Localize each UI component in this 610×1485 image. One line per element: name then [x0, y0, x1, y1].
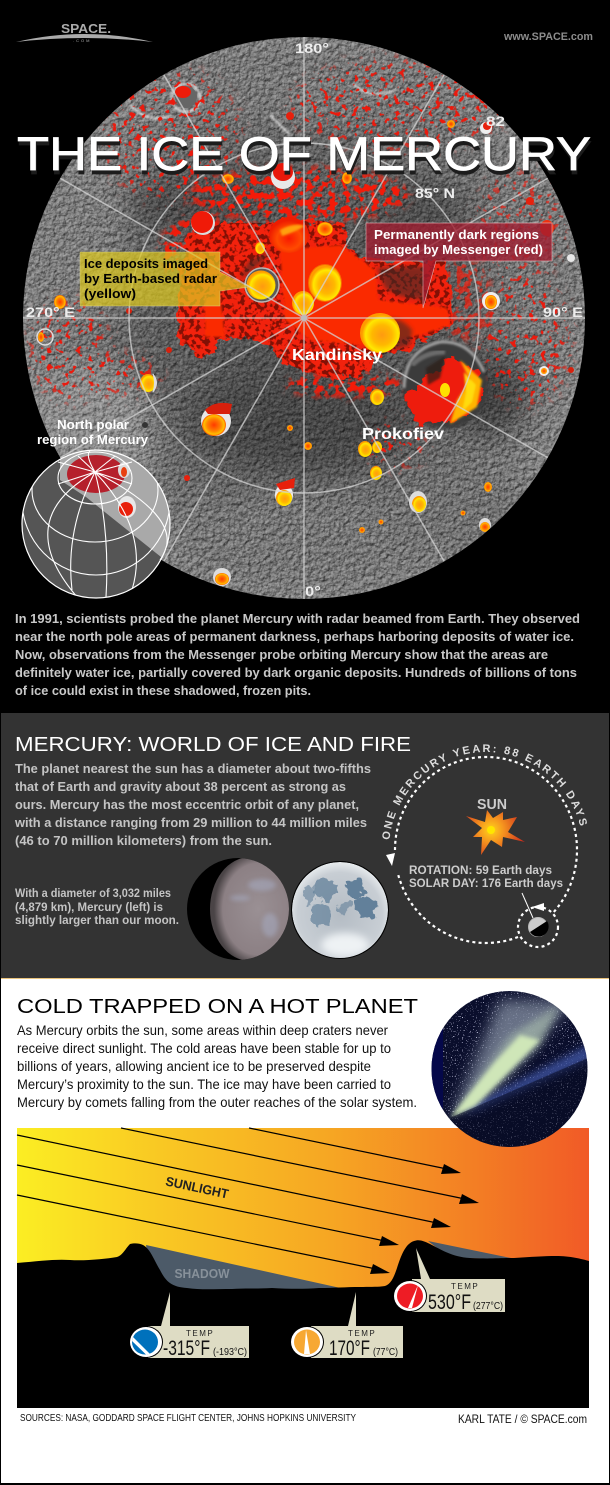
body text: As Mercury orbits the sun, some areas within deep craters never — [17, 1022, 388, 1038]
coordinate labels: 0° — [305, 583, 321, 599]
label: north polar region — [37, 417, 149, 447]
sunlight arrows — [17, 1128, 465, 1269]
sparse red speckles — [24, 50, 578, 476]
intro paragraph: of ice could exist in these shadowed, frozen pits. — [15, 683, 311, 698]
title: THE ICE OF MERCURY — [17, 127, 591, 180]
callout: ice deposits: Ice deposits imaged — [84, 256, 208, 271]
callout: -315 F: -315°F — [163, 1337, 210, 1360]
size comparison text: With a diameter of 3,032 miles — [15, 886, 171, 900]
callout: ice deposits — [80, 252, 249, 306]
logo: SPACE.com: SPACE. — [61, 21, 111, 36]
body text — [14, 761, 371, 848]
solid red core — [205, 245, 450, 345]
coordinate labels: 180° — [295, 40, 329, 56]
dark mottling inside the red area — [177, 220, 452, 380]
image: Mercury — [187, 857, 290, 961]
body text: Mercury’s proximity to the sun. The ice may have been carried to — [17, 1076, 391, 1092]
coordinate labels: 85° N — [415, 185, 455, 201]
body text — [17, 1022, 417, 1110]
callout: 170 F: TEMP — [348, 1329, 376, 1338]
image: Moon — [291, 861, 389, 959]
callout: permanently dark regions: imaged by Messenger (red) — [374, 242, 543, 257]
body text: billions of years, allowing ancient ice to be preserved despite — [17, 1058, 371, 1074]
crater labels: Prokofiev — [362, 426, 444, 443]
label: north polar region: North polar — [57, 417, 129, 432]
surface tone variation — [34, 93, 580, 560]
body text: receive direct sunlight. The cold areas have been stable for up to — [17, 1040, 391, 1056]
label: north polar region: region of Mercury — [37, 432, 149, 447]
orbit diagram — [382, 744, 587, 948]
website url: www.SPACE.com — [503, 31, 593, 43]
sunlight diagram — [17, 1128, 589, 1408]
crater labels — [292, 347, 444, 443]
latitude and longitude grid — [23, 37, 585, 599]
logo: SPACE.com: .COM — [73, 38, 91, 43]
coordinate labels — [26, 40, 583, 599]
size comparison text — [15, 886, 179, 927]
small polar craters — [37, 86, 575, 586]
bright rims in the upper left — [128, 81, 396, 136]
permanently dark regions (red) — [177, 220, 452, 380]
curved label: ONE MERCURY YEAR: 88 EARTH DAYS — [382, 744, 587, 840]
intro paragraph: definitely water ice, partially covered by dark organic deposits. Hundreds of billions of tons — [15, 665, 577, 680]
callout: 170 F: 170°F — [329, 1337, 370, 1360]
size comparison text: slightly larger than our moon. — [15, 913, 179, 927]
large ice craters (yellow) — [191, 163, 400, 353]
Mercury in orbit — [518, 907, 558, 947]
panel: world of ice and fire — [1, 713, 609, 978]
callout: 530 F: TEMP — [451, 1282, 479, 1291]
callout: ice deposits: (yellow) — [84, 286, 136, 301]
heading: MERCURY: WORLD OF ICE AND FIRE — [15, 734, 411, 756]
sunlight label: SUNLIGHT — [164, 1174, 230, 1202]
locator globe — [21, 449, 171, 599]
callout: -315 F: TEMP — [186, 1329, 214, 1338]
map: north polar region of Mercury — [20, 35, 590, 601]
callout: -315 F: (-193°C) — [213, 1347, 247, 1358]
coordinate labels: 270° E — [26, 304, 75, 320]
body text: that of Earth and gravity about 38 percent as strong as — [15, 779, 346, 794]
body text: with a distance ranging from 29 million to 44 million miles — [14, 815, 367, 830]
body text: Mercury by comets falling from the outer reaches of the solar system. — [17, 1094, 417, 1110]
body text: (46 to 70 million kilometers) from the sun. — [15, 833, 272, 848]
rotation text: ROTATION: 59 Earth days — [409, 863, 552, 877]
sun icon — [466, 810, 525, 855]
callout: 170 F: (77°C) — [373, 1347, 398, 1358]
title: THE ICE OF MERCURY — [18, 131, 592, 184]
image: comet — [431, 991, 590, 1147]
logo: SPACE.com — [16, 21, 153, 43]
dense red speckles — [154, 162, 497, 404]
body text: ours. Mercury has the most eccentric orbit of any planet, — [15, 797, 359, 812]
rotation text: SOLAR DAY: 176 Earth days — [409, 876, 563, 890]
callout: 530 F: (277°C) — [473, 1301, 503, 1312]
panel: cold trapped — [1, 978, 609, 1483]
intro paragraph — [15, 611, 580, 698]
Prokofiev crater — [402, 341, 488, 429]
heading: COLD TRAPPED ON A HOT PLANET — [17, 996, 418, 1018]
callout: 530 F — [393, 1248, 505, 1314]
callout: permanently dark regions — [366, 223, 552, 308]
shadow areas — [146, 1241, 516, 1290]
callout: 530 F: 530°F — [428, 1291, 471, 1314]
crater labels: Kandinsky — [292, 347, 382, 364]
author credit: KARL TATE / © SPACE.com — [458, 1412, 587, 1426]
surface texture — [20, 35, 590, 601]
coordinate labels: 82 — [486, 113, 505, 129]
callout: ice deposits: by Earth-based radar — [84, 271, 217, 286]
rotation text — [409, 863, 563, 890]
intro paragraph: near the north pole areas of permanent darkness, perhaps harboring deposits of water ice. — [15, 629, 574, 644]
source credits: SOURCES: NASA, GODDARD SPACE FLIGHT CENTER, JOHNS HOPKINS UNIVERSITY — [20, 1413, 356, 1424]
shadow label: SHADOW — [174, 1266, 230, 1281]
size comparison text: (4,879 km), Mercury (left) is — [15, 900, 163, 914]
callout: -315 F — [129, 1292, 249, 1360]
callout: permanently dark regions: Permanently dark regions — [374, 227, 539, 242]
sun label: SUN — [477, 796, 507, 813]
intro paragraph: In 1991, scientists probed the planet Mercury with radar beamed from Earth. They observed — [15, 611, 580, 626]
intro paragraph: Now, observations from the Messenger probe orbiting Mercury show that the areas are — [15, 647, 548, 662]
coordinate labels: 90° E — [543, 304, 583, 320]
body text: The planet nearest the sun has a diameter about two-fifths — [15, 761, 371, 776]
callout: 170 F — [290, 1292, 403, 1360]
ground — [17, 1240, 589, 1408]
